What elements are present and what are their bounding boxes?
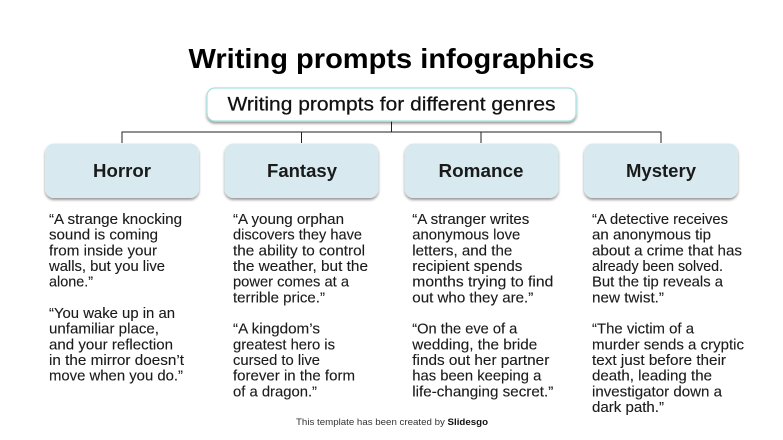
text block: Horror prompts: from inside your bbox=[49, 243, 157, 259]
text block: Mystery prompts: But the tip reveals a bbox=[592, 275, 724, 291]
text block: Mystery prompts: an anonymous tip bbox=[592, 228, 711, 244]
text block: Mystery prompts: investigator down a bbox=[592, 384, 723, 400]
text block: Fantasy prompts: power comes at a bbox=[233, 275, 350, 291]
text block: Fantasy prompts: the weather, but the bbox=[233, 259, 368, 275]
text block: Fantasy prompts bbox=[233, 212, 368, 400]
text block: Fantasy prompts: forever in the form bbox=[233, 369, 355, 385]
text block: Fantasy prompts: greatest hero is bbox=[233, 337, 335, 353]
text block: Horror prompts: and your reflection bbox=[49, 337, 173, 353]
panel: Fantasy bbox=[224, 144, 378, 400]
text block: Fantasy prompts: discovers they have bbox=[233, 228, 362, 244]
text block: Fantasy prompts: the ability to control bbox=[233, 243, 365, 259]
genre box: Romance: Romance bbox=[438, 161, 524, 181]
footer credit: This template has been created by Slidesgo bbox=[296, 417, 488, 428]
text block: Fantasy prompts: of a dragon.” bbox=[233, 384, 317, 400]
text block: Horror prompts: sound is coming bbox=[49, 228, 158, 244]
genre box: Horror: Horror bbox=[93, 161, 151, 181]
text block: Mystery prompts: already been solved. bbox=[592, 259, 723, 275]
text block: Romance prompts: out who they are.” bbox=[412, 290, 533, 306]
text block: Fantasy prompts: cursed to live bbox=[233, 353, 320, 369]
text block: Romance prompts: recipient spends bbox=[412, 259, 522, 275]
text block: Romance prompts bbox=[411, 212, 553, 400]
text block: Romance prompts: “A stranger writes bbox=[412, 212, 529, 228]
text block: Horror prompts: “You wake up in an bbox=[49, 306, 175, 322]
text block: Fantasy prompts: terrible price.” bbox=[233, 290, 325, 306]
text block: Romance prompts: life-changing secret.” bbox=[412, 384, 553, 400]
text block: Romance prompts: letters, and the bbox=[412, 243, 512, 259]
text block: Horror prompts: move when you do.” bbox=[49, 369, 183, 385]
text block: Mystery prompts: death, leading the bbox=[592, 369, 712, 385]
text block: Mystery prompts: murder sends a cryptic bbox=[592, 337, 744, 353]
connector lines bbox=[122, 121, 661, 143]
text block: Horror prompts: walls, but you live bbox=[48, 259, 165, 275]
text block: Romance prompts: anonymous love bbox=[412, 228, 520, 244]
text block: Mystery prompts: new twist.” bbox=[592, 290, 664, 306]
title: Writing prompts infographics bbox=[188, 43, 594, 74]
text block: Mystery prompts: text just before their bbox=[592, 353, 726, 369]
text block: Mystery prompts: dark path.” bbox=[592, 400, 664, 416]
genre box: Fantasy: Fantasy bbox=[267, 161, 337, 181]
text block: Horror prompts bbox=[48, 212, 184, 385]
genre box: Mystery bbox=[584, 144, 738, 198]
panel: Mystery bbox=[584, 144, 744, 416]
text block: Mystery prompts: “The victim of a bbox=[592, 322, 695, 338]
genre box: Mystery: Mystery bbox=[626, 161, 696, 181]
central heading box: Writing prompts for different genres bbox=[228, 94, 556, 116]
text block: Horror prompts: “A strange knocking bbox=[49, 212, 182, 228]
genre box: Fantasy bbox=[224, 144, 378, 198]
genre box: Romance bbox=[404, 144, 558, 198]
text block: Mystery prompts: about a crime that has bbox=[592, 243, 742, 259]
panel: Romance bbox=[404, 144, 558, 400]
genre box: Horror bbox=[45, 144, 199, 198]
text block: Mystery prompts bbox=[592, 212, 744, 416]
text block: Mystery prompts: “A detective receives bbox=[592, 212, 728, 228]
text block: Horror prompts: unfamiliar place, bbox=[49, 322, 159, 338]
text block: Romance prompts: finds out her partner bbox=[412, 353, 549, 369]
text block: Fantasy prompts: “A kingdom’s bbox=[233, 322, 320, 338]
text block: Horror prompts: alone.” bbox=[49, 275, 93, 291]
central heading box bbox=[207, 88, 576, 121]
text block: Romance prompts: wedding, the bride bbox=[411, 337, 537, 353]
text block: Horror prompts: in the mirror doesn’t bbox=[49, 353, 184, 369]
text block: Romance prompts: months trying to find bbox=[412, 275, 553, 291]
text block: Romance prompts: has been keeping a bbox=[412, 369, 542, 385]
text block: Romance prompts: “On the eve of a bbox=[412, 322, 518, 338]
panel: Horror bbox=[45, 144, 199, 385]
text block: Fantasy prompts: “A young orphan bbox=[233, 212, 344, 228]
